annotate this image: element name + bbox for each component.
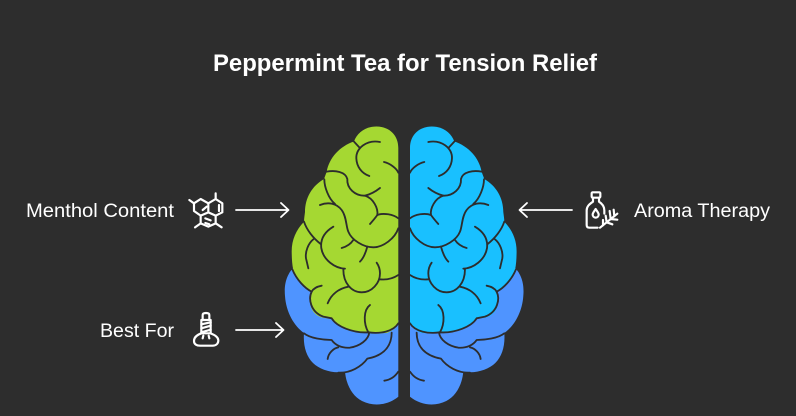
fold lines: upper: [304, 142, 398, 269]
fold lines: upper: [410, 142, 504, 269]
icon: herbal compress bundle: [194, 313, 218, 346]
brain: right hemisphere: [410, 126, 524, 404]
arrow: aroma to brain: [520, 203, 572, 217]
lower lobes: blue: [410, 268, 524, 404]
title: Peppermint Tea for Tension Relief: [213, 50, 598, 77]
fold lines: lower: [292, 263, 398, 381]
icon: molecule: [189, 193, 222, 227]
label: Best For: Best For: [100, 321, 175, 342]
label: Menthol Content: Menthol Content: [26, 201, 175, 222]
lower lobes: blue: [285, 268, 398, 404]
icon: oil bottle with herb sprig: [587, 192, 617, 228]
arrow: best for to brain: [236, 323, 284, 337]
upper lobes: cyan: [410, 126, 517, 333]
brain: left hemisphere: [285, 126, 398, 404]
arrow: menthol to brain: [236, 203, 288, 217]
label: Aroma Therapy: Aroma Therapy: [634, 201, 771, 222]
fold lines: lower: [410, 263, 516, 381]
upper lobes: green: [292, 126, 398, 333]
